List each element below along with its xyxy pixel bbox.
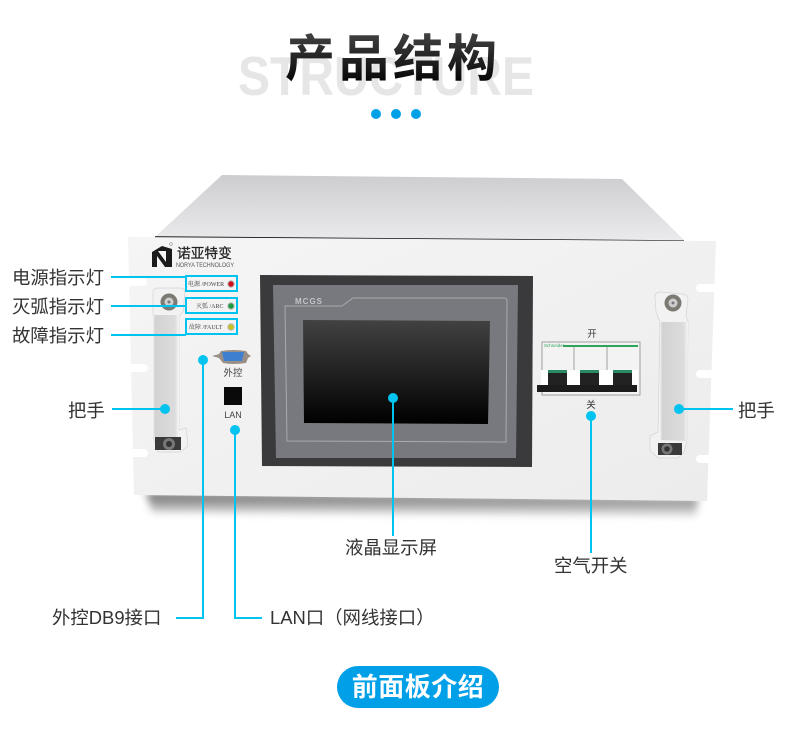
callout labels: 外控DB9接口: [52, 607, 161, 628]
button: front panel intro: [337, 666, 499, 708]
callout labels: 液晶显示屏: [345, 537, 437, 558]
right handle: [650, 292, 688, 458]
chassis top: [155, 175, 684, 240]
background title: STRUCTURE: STRUCTURE: [238, 45, 534, 107]
callouts: [111, 276, 733, 618]
brand logo: NORYA TECHNOLOGY: [176, 263, 234, 269]
LCD display: [260, 275, 533, 467]
LCD display: MCGS: [295, 297, 323, 306]
indicator lights: [188, 280, 234, 331]
callout labels: 把手: [68, 400, 105, 421]
brand logo: 诺亚特变: [177, 246, 232, 261]
DB9 port: 外控: [223, 367, 243, 379]
indicator lights: 故障 /FAULT: [189, 323, 223, 331]
brand logo: [152, 243, 234, 269]
device shadow: [146, 492, 698, 516]
leader lines: indicator lights: [111, 277, 186, 335]
indicator lights: 灭弧 /ARC: [196, 302, 224, 310]
air switch: Schneider: [544, 343, 565, 348]
panel mounting notches: [115, 278, 728, 463]
indicator lights: 电源 /POWER: [188, 280, 224, 288]
air switch: [537, 329, 640, 411]
callout labels: 把手: [738, 400, 775, 421]
leader: air switch: [590, 416, 592, 553]
callout labels: 电源指示灯: [12, 267, 104, 288]
leader: DB9: [176, 360, 203, 618]
leader: right handle: [679, 408, 733, 410]
button: front panel intro: 前面板介绍: [352, 672, 484, 702]
air switch: 关: [586, 399, 596, 411]
title: 产品结构: [285, 31, 501, 87]
LAN port: [224, 387, 242, 420]
front panel: [128, 237, 716, 501]
leader: left handle: [112, 408, 165, 410]
leader: LAN: [235, 430, 262, 618]
DB9 port: [212, 350, 251, 379]
callout boxes: indicator lights: [186, 276, 237, 334]
callout labels: LAN口（网线接口）: [270, 607, 435, 628]
callout dots: [160, 355, 684, 435]
left handle: [152, 288, 188, 452]
device: [115, 175, 728, 516]
callout labels: 空气开关: [554, 555, 628, 576]
leader: LCD: [392, 398, 394, 536]
title dots: [371, 109, 421, 119]
LAN port: LAN: [224, 410, 242, 420]
callout labels: [12, 267, 775, 628]
air switch: 开: [587, 329, 597, 340]
callout labels: 灭弧指示灯: [12, 296, 104, 317]
callout labels: 故障指示灯: [12, 325, 104, 346]
